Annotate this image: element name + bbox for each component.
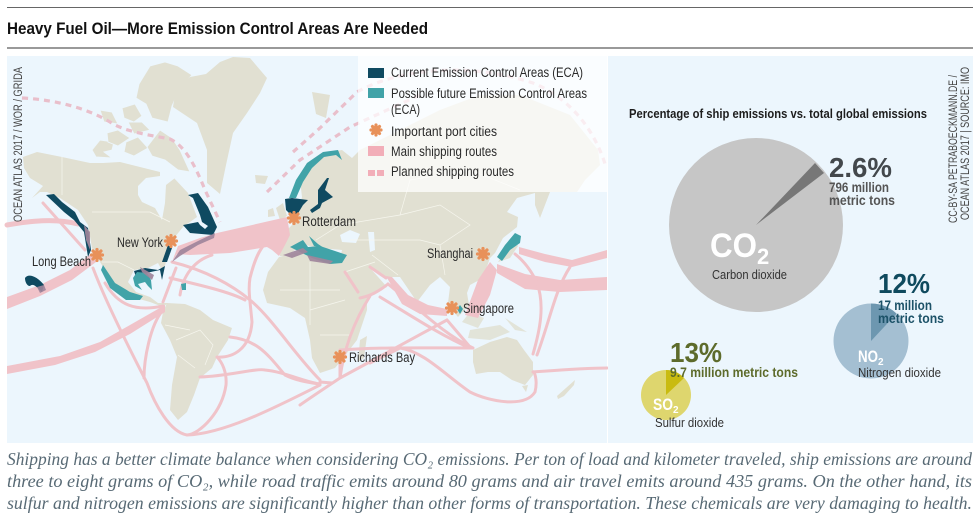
main shipping routes: [7, 203, 607, 435]
port cities: New York: [117, 235, 163, 250]
pie: nitrogen dioxide: 12%: [878, 268, 930, 299]
pie: nitrogen dioxide: Nitrogen dioxide: [858, 365, 941, 380]
pie: carbon dioxide: 796 million: [829, 180, 889, 195]
legend: Current Emission Control Areas (ECA): [391, 65, 583, 80]
pie: nitrogen dioxide: 17 million: [878, 298, 932, 313]
route overlap on ECA: [37, 225, 333, 293]
legend: Main shipping routes: [391, 144, 497, 159]
pie: sulfur dioxide: Sulfur dioxide: [655, 415, 724, 430]
land masses: [23, 57, 600, 420]
port cities: Shanghai: [427, 246, 473, 261]
pie: sulfur dioxide: [641, 337, 798, 430]
pie: sulfur dioxide: 13%: [670, 337, 722, 368]
pie: carbon dioxide: CO: [710, 227, 757, 265]
chart heading: Percentage of ship emissions vs. total global emissions: [629, 106, 927, 121]
pie: sulfur dioxide: 9.7 million metric tons: [670, 365, 798, 380]
port cities: Singapore: [463, 301, 514, 316]
pie: nitrogen dioxide: metric tons: [878, 311, 944, 326]
pie: carbon dioxide: Carbon dioxide: [712, 267, 787, 282]
pie: nitrogen dioxide: [834, 268, 944, 380]
port cities: Rotterdam: [302, 214, 356, 229]
map credit: OCEAN ATLAS 2017 / WOR / GRIDA: [13, 67, 25, 222]
title: Heavy Fuel Oil—More Emission Control Areas Are Needed: [7, 20, 428, 38]
pie: carbon dioxide: 2: [757, 244, 769, 269]
source credit: [948, 67, 972, 223]
country borders: [62, 157, 520, 368]
pie: sulfur dioxide: SO: [653, 396, 673, 414]
inland seas: [138, 165, 375, 252]
current emission control areas: [25, 178, 333, 292]
pie: carbon dioxide: [669, 138, 895, 312]
legend: [358, 56, 607, 192]
pie: carbon dioxide: metric tons: [829, 193, 895, 208]
caption: three to eight grams of CO₂, while road traffic emits around 80 grams and air travel emits around 435 grams. On the other hand, its: [7, 471, 972, 491]
pie: carbon dioxide: 2.6%: [829, 152, 892, 183]
pie: sulfur dioxide: 2: [673, 405, 679, 416]
port cities: Richards Bay: [349, 350, 415, 365]
port cities: Long Beach: [32, 254, 91, 269]
legend: Important port cities: [391, 124, 497, 139]
source credit: OCEAN ATLAS 2017 | SOURCE: IMO: [960, 67, 972, 220]
caption: Shipping has a better climate balance when considering CO₂ emissions. Per ton of load and kilometer traveled, ship emissions are around: [7, 449, 972, 469]
source credit: CC-BY-SA PETRABOECKMANN.DE /: [948, 74, 960, 223]
planned shipping routes: [22, 70, 606, 222]
possible future emission control areas: [101, 150, 521, 314]
pie: nitrogen dioxide: 2: [878, 357, 884, 368]
caption: [7, 449, 972, 513]
panel: world map: [7, 56, 607, 443]
pie: nitrogen dioxide: NO: [858, 348, 878, 366]
port cities: [32, 212, 514, 365]
legend: (ECA): [391, 102, 420, 117]
legend: Planned shipping routes: [391, 164, 514, 179]
panel: emissions: [608, 56, 973, 443]
legend: Possible future Emission Control Areas: [391, 86, 587, 101]
caption: sulfur and nitrogen emissions are significantly higher than other forms of transportation. These chemicals are very damaging to health.: [7, 493, 972, 513]
